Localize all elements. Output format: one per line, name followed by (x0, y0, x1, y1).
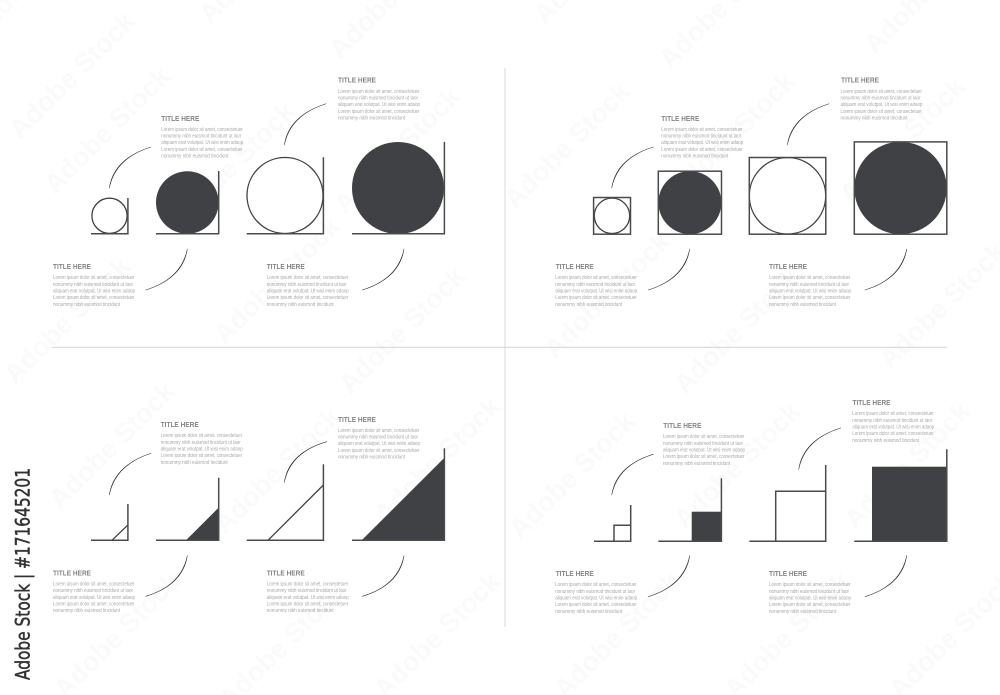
text block (663, 423, 745, 467)
text block: aliquam erat volutpat. Ut wisi enim adaop (555, 288, 637, 294)
text block: Lorem ipsum dolor sit amet, consectetuer (267, 295, 348, 301)
text block: Lorem ipsum dolor sit amet, consectetuer (769, 582, 851, 588)
text block: Lorem ipsum dolor sit amet, consectetuer (338, 89, 420, 95)
text block: nonummy nibh euismod tincidunt (267, 302, 334, 308)
curved connector (787, 104, 829, 145)
text: Adobe Stock (333, 261, 472, 399)
text block: Lorem ipsum dolor sit amet, consectetuer (161, 433, 242, 439)
text block: Lorem ipsum dolor sit amet, consectetuer (661, 147, 743, 153)
text block (555, 571, 637, 615)
icon: large outlined triangle (247, 464, 323, 540)
icon: largest filled circle with corner (352, 142, 444, 234)
text: Adobe Stock (538, 226, 677, 364)
text block: Lorem ipsum dolor sit amet, consectetuer (161, 453, 242, 459)
text block: nonummy nibh euismod tincidunt (161, 154, 229, 160)
text block: Lorem ipsum dolor sit amet, consectetuer (267, 582, 348, 588)
text: Adobe Stock (328, 81, 467, 219)
curved connector (146, 556, 187, 596)
text block: TITLE HERE (267, 264, 305, 271)
text block: aliquam erat volutpat. Ut wisi enim adaop (53, 595, 135, 601)
text block: Lorem ipsum dolor sit amet, consectetuer (53, 582, 135, 588)
curved connector (648, 249, 690, 290)
text block: Lorem ipsum dolor sit amet, consectetuer (661, 127, 743, 133)
curved connector (109, 147, 151, 188)
text block: TITLE HERE (663, 423, 702, 430)
curved connector (865, 249, 907, 290)
text block: Lorem ipsum dolor sit amet, consectetuer (840, 89, 922, 95)
text block: TITLE HERE (161, 116, 200, 123)
text block (267, 264, 349, 308)
text: Adobe Stock (3, 6, 142, 144)
text block: TITLE HERE (53, 570, 91, 578)
text block: Lorem ipsum dolor sit amet, consectetuer (769, 602, 851, 608)
text block: Lorem ipsum dolor sit amet, consectetuer (338, 428, 420, 434)
text block (769, 264, 851, 308)
text block: Lorem ipsum dolor sit amet, consectetuer (555, 275, 637, 281)
text: Adobe Stock (208, 401, 347, 539)
icon: small outlined square (594, 505, 631, 541)
panel: triangles in corner brackets (53, 417, 444, 614)
text block: TITLE HERE (556, 264, 594, 271)
text block: TITLE HERE (769, 264, 807, 271)
curved connector (362, 556, 404, 596)
text: Adobe Stock (838, 396, 977, 534)
text block: nonummy nibh euismod tincidunt (161, 460, 228, 466)
text block: aliquam erat volutpat. Ut wisi enim adaop (53, 288, 135, 294)
text block: nonummy nibh euismod tincidunt (663, 461, 731, 467)
text block: aliquam erat volutpat. Ut wisi enim adaop (663, 448, 745, 454)
text block: nonummy nibh euismod tincidunt ut laor (267, 588, 347, 594)
panel: squares in corner brackets (555, 400, 947, 615)
panel: circles in squares (555, 78, 947, 308)
text block: aliquam erat volutpat. Ut wisi enim adaop (267, 288, 349, 294)
text block: Lorem ipsum dolor sit amet, consectetuer (852, 431, 934, 437)
text block: nonummy nibh euismod tincidunt ut laor (661, 134, 742, 140)
text block (338, 78, 420, 122)
text block: Lorem ipsum dolor sit amet, consectetuer (769, 275, 851, 281)
text block: nonummy nibh euismod tincidunt ut laor (267, 282, 347, 288)
text block (555, 264, 637, 308)
text: Adobe Stock (668, 396, 807, 534)
text block: nonummy nibh euismod tincidunt ut laor (338, 434, 418, 440)
text block: Lorem ipsum dolor sit amet, consectetuer (267, 602, 348, 608)
curved connector (612, 454, 653, 495)
text block: nonummy nibh euismod tincidunt ut laor (161, 134, 242, 140)
text: Adobe Stock (0, 251, 137, 389)
text block (840, 78, 923, 122)
text block: aliquam erat volutpat. Ut wisi enim adaop (769, 288, 851, 294)
text block: nonummy nibh euismod tincidunt (661, 154, 729, 160)
text block: Lorem ipsum dolor sit amet, consectetuer (53, 275, 135, 281)
icon: filled square (658, 478, 722, 541)
text block (338, 417, 420, 460)
text block: Lorem ipsum dolor sit amet, consectetuer (338, 109, 420, 115)
panel: circles in corner brackets (53, 78, 444, 308)
text block: Lorem ipsum dolor sit amet, consectetuer (555, 602, 637, 608)
text block: nonummy nibh euismod tincidunt (555, 609, 623, 615)
text block (53, 264, 135, 308)
text: Adobe Stock (498, 76, 637, 214)
text block: nonummy nibh euismod tincidunt ut laor (53, 588, 133, 594)
text block: Lorem ipsum dolor sit amet, consectetuer (338, 448, 420, 454)
text block: aliquam erat volutpat. Ut wisi enim adaop (555, 596, 637, 602)
curved connector (362, 249, 404, 290)
text block: nonummy nibh euismod tincidunt (840, 116, 908, 122)
text block: Lorem ipsum dolor sit amet, consectetuer (555, 295, 637, 301)
text block: TITLE HERE (556, 571, 594, 578)
text block: TITLE HERE (852, 400, 891, 407)
curved connector (799, 428, 841, 469)
text block: TITLE HERE (338, 78, 376, 84)
text block (267, 570, 349, 614)
text block: Lorem ipsum dolor sit amet, consectetuer (53, 602, 135, 608)
curved connector (109, 453, 151, 495)
text block: Lorem ipsum dolor sit amet, consectetuer (769, 295, 851, 301)
text block (661, 116, 743, 160)
text: Adobe Stock (833, 71, 972, 209)
text block: nonummy nibh euismod tincidunt ut laor (555, 589, 635, 595)
text block: nonummy nibh euismod tincidunt (852, 438, 920, 444)
curved connector (146, 249, 187, 290)
curved connector (612, 147, 653, 188)
text block: nonummy nibh euismod tincidunt (769, 609, 837, 615)
text block: Lorem ipsum dolor sit amet, consectetuer (663, 434, 745, 440)
text block: Lorem ipsum dolor sit amet, consectetuer (161, 127, 243, 133)
stock image credit: Adobe Stock | #171645201 (12, 468, 34, 680)
text block: nonummy nibh euismod tincidunt ut laor (769, 282, 849, 288)
text block: TITLE HERE (53, 264, 91, 271)
text block: TITLE HERE (769, 571, 807, 578)
text block: nonummy nibh euismod tincidunt ut laor (53, 282, 133, 288)
text block (769, 571, 851, 615)
text block: aliquam erat volutpat. Ut wisi enim adaop (161, 140, 243, 146)
text block: aliquam erat volutpat. Ut wisi enim adaop (840, 102, 923, 108)
text block: nonummy nibh euismod tincidunt (53, 608, 121, 614)
text: Adobe Stock (663, 66, 802, 204)
text block: nonummy nibh euismod tincidunt (338, 116, 406, 122)
text block: nonummy nibh euismod tincidunt (267, 608, 334, 614)
text block: nonummy nibh euismod tincidunt ut laor (663, 441, 743, 447)
text block: aliquam erat volutpat. Ut wisi enim adaop (161, 446, 243, 452)
curved connector (284, 442, 327, 482)
text block: Lorem ipsum dolor sit amet, consectetuer (852, 411, 934, 417)
text block: nonummy nibh euismod tincidunt ut laor (338, 96, 418, 102)
text block: aliquam erat volutpat. Ut wisi enim adaop (661, 140, 743, 146)
text block: Lorem ipsum dolor sit amet, consectetuer (267, 275, 348, 281)
icon: large outlined square (749, 465, 826, 541)
text block: TITLE HERE (338, 417, 376, 424)
text block: Lorem ipsum dolor sit amet, consectetuer (53, 295, 135, 301)
curved connector (648, 556, 690, 597)
text block: nonummy nibh euismod tincidunt ut laor (161, 440, 241, 446)
text block: nonummy nibh euismod tincidunt ut laor (769, 589, 849, 595)
text block: aliquam erat volutpat. Ut wisi enim adaop (267, 595, 349, 601)
icon: small outlined triangle (91, 504, 128, 540)
text block: Lorem ipsum dolor sit amet, consectetuer (840, 109, 922, 115)
text: Adobe Stock (208, 211, 347, 349)
icon: filled circle with corner (156, 171, 219, 234)
text block: nonummy nibh euismod tincidunt ut laor (840, 96, 921, 102)
text: Adobe Stock (668, 261, 807, 399)
icon: filled circle in square (658, 171, 722, 234)
text block: nonummy nibh euismod tincidunt ut laor (852, 418, 933, 424)
text: Adobe Stock (163, 96, 302, 234)
text: Adobe Stock (503, 406, 642, 544)
text block: Lorem ipsum dolor sit amet, consectetuer (555, 582, 637, 588)
text block: TITLE HERE (661, 116, 700, 123)
text: Adobe Stock (43, 376, 182, 514)
text block (161, 422, 243, 466)
icon: largest filled triangle (352, 448, 444, 540)
text block (161, 116, 243, 160)
text block: nonummy nibh euismod tincidunt (769, 302, 837, 308)
text block: TITLE HERE (841, 78, 879, 84)
icon: large outlined circle in square (749, 158, 826, 234)
text block: aliquam erat volutpat. Ut wisi enim adaop (852, 424, 934, 430)
curved connector (284, 104, 326, 145)
icon: largest filled square (854, 449, 947, 541)
text block: nonummy nibh euismod tincidunt (338, 454, 406, 460)
text: Adobe Stock (368, 391, 507, 529)
icon: largest filled circle in square (854, 142, 947, 234)
text block: Lorem ipsum dolor sit amet, consectetuer (161, 147, 243, 153)
text block: nonummy nibh euismod tincidunt ut laor (555, 282, 635, 288)
text block (852, 400, 934, 444)
icon: small outlined circle with corner (91, 198, 128, 234)
icon: small outlined circle in square (594, 198, 630, 234)
curved connector (865, 556, 907, 597)
text block: Lorem ipsum dolor sit amet, consectetuer (663, 454, 745, 460)
text block: TITLE HERE (161, 422, 199, 429)
text block: TITLE HERE (267, 570, 305, 578)
text block (53, 570, 135, 614)
icon: large outlined circle with corner (247, 157, 323, 234)
text block: nonummy nibh euismod tincidunt (53, 302, 121, 308)
text block: aliquam erat volutpat. Ut wisi enim adaop (338, 102, 420, 108)
text block: aliquam erat volutpat. Ut wisi enim adaop (769, 596, 851, 602)
text block: nonummy nibh euismod tincidunt (555, 302, 623, 308)
text: Adobe Stock (38, 61, 177, 199)
text block: aliquam erat volutpat. Ut wisi enim adaop (338, 441, 420, 447)
icon: filled triangle (156, 478, 219, 540)
